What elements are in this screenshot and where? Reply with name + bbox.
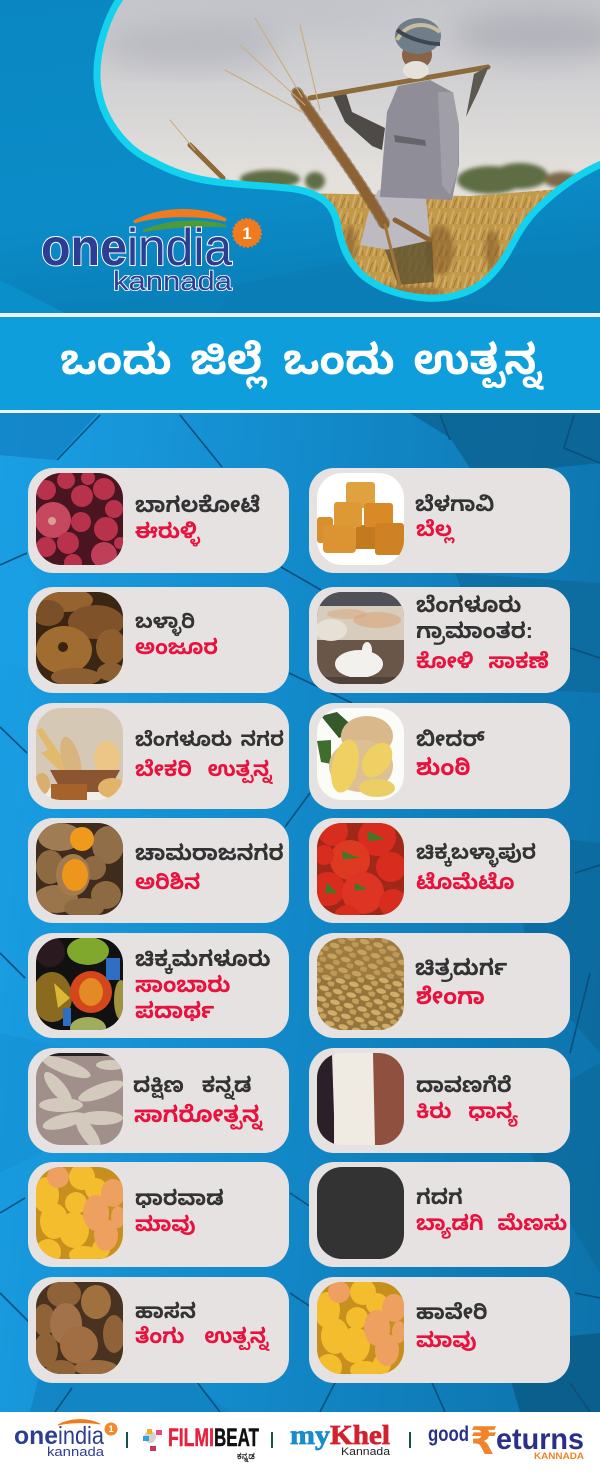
hoe [310,67,488,98]
product name: ಮಾವು [416,1329,477,1352]
photo: turmeric [36,823,123,915]
separator [409,1432,411,1448]
logo: goodReturns [428,1419,585,1463]
card: Chamarajanagar [28,818,289,923]
district name: ಬೀದರ್ [416,728,485,751]
product name: ಈರುಳ್ಳಿ [135,520,200,543]
product name: ಪದಾರ್ಥ [135,998,214,1023]
oneindia kannada logo: kannada [113,266,233,296]
faceted blue background panel [0,413,600,1412]
logo: Filmibeat [143,1424,259,1463]
district name: ಬೆಳಗಾವಿ [415,493,494,516]
card: Ballari [28,587,289,693]
product name: ಅಂಜೂರ [135,636,218,659]
photo: mangoes [317,1282,404,1374]
wheat stalks [170,18,430,285]
district name: ಬೆಂಗಳೂರು [416,592,521,617]
logo: oneindia kannada [14,1420,118,1459]
oneindia kannada logo: one [41,219,127,277]
separator [126,1432,128,1448]
background facets [0,250,600,313]
photo: tomatoes [317,823,404,915]
product name: ಸಾಂಬಾರು [135,972,230,997]
district name: ಚಾಮರಾಜನಗರ [135,840,284,865]
logo: myKhel [290,1420,391,1458]
district name: ಹಾವೇರಿ [416,1301,487,1324]
logo: myKhel: my [290,1420,331,1450]
oneindia kannada logo [41,210,261,296]
card: Bidar [309,703,570,809]
photo: coconuts [36,1282,123,1374]
district name: ಚಿಕ್ಕಬಳ್ಳಾಪುರ [416,841,536,864]
card: Haveri [309,1277,570,1383]
product name: ಕಿರು ಧಾನ್ಯ [416,1100,518,1123]
product name: ಮಾವು [135,1213,196,1236]
tree line [240,163,580,194]
card: Davanagere [309,1048,570,1153]
district name: ಬಾಗಲಕೋಟೆ [135,492,260,517]
card: Gadag [309,1162,570,1267]
logo: oneindia kannada: 1 [108,1424,114,1434]
header banner with farmer photo and logo [0,0,600,313]
logo: goodReturns: good [428,1423,469,1446]
title: ಒಂದು ಜಿಲ್ಲೆ ಒಂದು ಉತ್ಪನ್ನ [60,336,542,383]
product name [135,972,230,1023]
logo: Filmibeat: ಕನ್ನಡ [237,1451,255,1463]
card: Hassan [28,1277,289,1383]
photo: ginger [317,708,404,800]
logo: Filmibeat: FILMI [168,1424,214,1452]
logo: Filmibeat: BEAT [214,1424,259,1452]
district name: ಧಾರವಾಡ [135,1187,224,1210]
card: Bagalkot [28,468,289,573]
product name: ಬ್ಯಾಡಗಿ ಮೆಣಸು [416,1212,567,1235]
photo placeholder: dark tile [317,1167,404,1259]
card: Dharwad [28,1162,289,1267]
card: Dakshina Kannada [28,1048,289,1153]
photo: mangoes [36,1167,123,1259]
oneindia kannada logo: india [127,219,232,277]
farmer photo [90,0,600,310]
wheat field [320,190,554,295]
photo: bakery products [36,708,123,800]
footer logo strip [0,1412,600,1469]
photo: onions [36,473,123,565]
product name: ಬೆಲ್ಲ [416,518,453,541]
district name [416,592,533,645]
card: Chikkamagaluru [28,933,289,1038]
logo: goodReturns: eturns [496,1423,584,1456]
product name: ಅರಿಶಿನ [135,871,200,894]
logo: myKhel: Khel [330,1420,391,1450]
logo: oneindia kannada: kannada [47,1444,105,1459]
photo: poultry [317,592,404,684]
district name: ಹಾಸನ [135,1300,196,1323]
logo: oneindia kannada: india [58,1422,104,1450]
photo border [97,0,600,298]
district name: ಬಳ್ಳಾರಿ [135,611,195,633]
card: Chikkaballapur [309,818,570,923]
district name: ಗ್ರಾಮಾಂತರ: [416,618,533,643]
logo: myKhel: Kannada [341,1446,391,1458]
oneindia kannada logo: 1 [242,224,252,243]
title band [0,313,600,413]
product name: ಬೇಕರಿ ಉತ್ಪನ್ನ [135,758,272,781]
product name: ಕೋಳಿ ಸಾಕಣೆ [416,650,549,673]
photo: groundnuts [317,938,404,1030]
photo: fish [36,1053,123,1145]
card: Bengaluru Urban [28,703,289,809]
photo: jaggery [317,473,404,565]
product name: ತೆಂಗು ಉತ್ಪನ್ನ [135,1325,269,1348]
product name: ಶೇಂಗಾ [416,983,485,1009]
district name: ದಾವಣಗೆರೆ [416,1074,512,1097]
card: Chitradurga [309,933,570,1038]
logo: goodReturns: ₹ [470,1419,498,1463]
card: Bengaluru Rural [309,587,570,693]
district name: ಚಿಕ್ಕಮಗಳೂರು [135,946,271,971]
district name: ಗದಗ [416,1186,463,1209]
district name: ಚಿತ್ರದುರ್ಗ [415,955,507,980]
photo: figs [36,592,123,684]
product name: ಟೊಮೆಟೊ [416,871,515,894]
card: Belagavi [309,468,570,573]
logo: oneindia kannada: one [14,1422,58,1450]
logo: goodReturns: KANNADA [534,1451,585,1461]
turban, face, beard [402,50,432,66]
photo: millets [317,1053,404,1145]
separator [271,1432,273,1448]
product name: ಸಾಗರೋತ್ಪನ್ನ [134,1102,262,1127]
farmer figure [310,18,489,285]
photo: spices [36,938,123,1030]
product name: ಶುಂಠಿ [416,754,470,780]
district name: ಬೆಂಗಳೂರು ನಗರ [135,729,284,751]
district name: ದಕ್ಷಿಣ ಕನ್ನಡ [133,1074,252,1097]
